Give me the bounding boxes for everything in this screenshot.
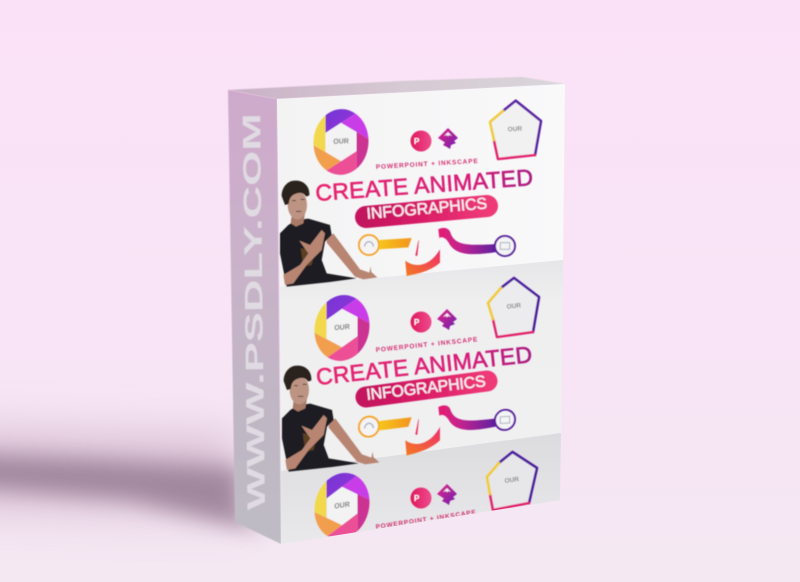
powerpoint icon: P	[414, 137, 420, 146]
band two surface	[280, 260, 563, 471]
powerpoint icon: P	[414, 494, 420, 503]
box spine	[228, 90, 281, 544]
pentagon graphic	[490, 101, 541, 159]
band three surface	[281, 433, 561, 544]
pentagon graphic: OUR	[508, 126, 523, 133]
presenter photo	[280, 181, 377, 287]
pentagon graphic	[487, 452, 537, 510]
ring graphic: OUR	[333, 136, 350, 146]
timeline graphic	[359, 401, 515, 458]
main title: CREATE ANIMATED	[315, 341, 533, 390]
spine text: WWW.PSDLY.COM	[238, 113, 271, 510]
ring graphic	[314, 472, 370, 536]
inkscape icon	[437, 484, 457, 505]
ring graphic	[283, 260, 401, 396]
powerpoint icon: P	[414, 318, 420, 327]
infographics pill: INFOGRAPHICS	[366, 196, 488, 223]
presenter photo	[282, 366, 379, 472]
inkscape icon	[438, 128, 458, 149]
ring graphic: OUR	[334, 322, 351, 332]
pentagon graphic	[488, 278, 539, 337]
box cast shadow	[0, 428, 262, 532]
powerpoint icon	[410, 130, 432, 152]
product box	[228, 77, 565, 544]
subtitle: POWERPOINT + INKSCAPE	[376, 158, 479, 171]
timeline graphic	[359, 228, 515, 276]
band one artwork	[280, 78, 541, 287]
ring graphic: OUR	[334, 499, 351, 511]
infographics pill: INFOGRAPHICS	[366, 373, 487, 404]
powerpoint icon	[410, 488, 432, 508]
powerpoint icon	[410, 312, 432, 332]
band three artwork	[314, 450, 539, 536]
inkscape icon	[437, 309, 457, 330]
band two artwork	[282, 260, 539, 472]
pentagon graphic: OUR	[504, 476, 520, 485]
pentagon graphic: OUR	[506, 302, 522, 311]
main title: CREATE ANIMATED	[314, 164, 534, 206]
box front face	[277, 84, 565, 287]
subtitle: POWERPOINT + INKSCAPE	[375, 509, 477, 531]
ring graphic	[282, 78, 400, 206]
box lid top	[228, 77, 565, 99]
subtitle: POWERPOINT + INKSCAPE	[375, 336, 478, 354]
